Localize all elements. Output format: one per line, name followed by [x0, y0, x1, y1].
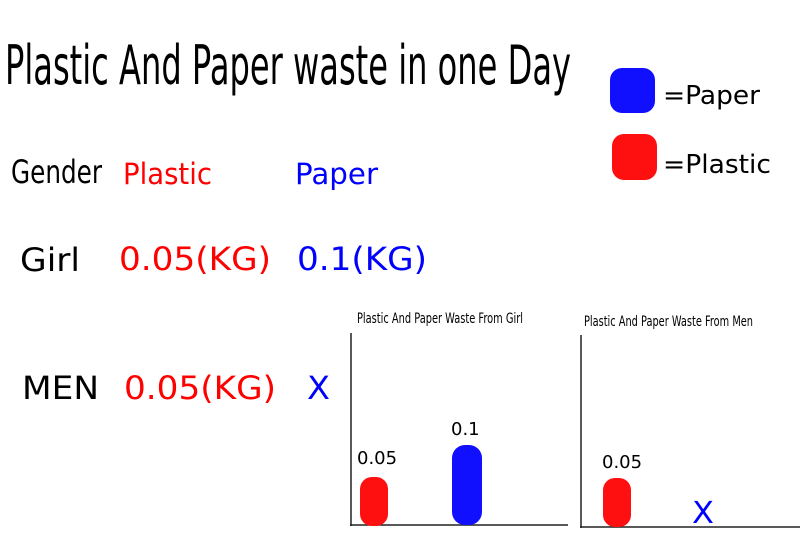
chart title: girl: Plastic And Paper Waste From Girl: [357, 311, 523, 327]
header: plastic: Plastic: [123, 157, 212, 191]
row: girl: Girl: [20, 241, 80, 279]
row: men: MEN: [22, 369, 99, 407]
bar: girl plastic: [360, 477, 388, 526]
data table: 0.05(KG): [124, 369, 276, 407]
chart: girl: [350, 311, 568, 526]
chart: girl: 0.05: [357, 448, 397, 469]
data table: X: [307, 369, 330, 407]
header: paper: Paper: [295, 157, 378, 191]
legend: paper swatch: [610, 68, 655, 113]
bar: girl paper: [452, 445, 482, 525]
legend: [610, 68, 771, 180]
header: gender: Gender: [11, 153, 103, 191]
data table: 0.1(KG): [297, 240, 427, 278]
chart: girl: 0.1: [451, 419, 480, 440]
chart: men: [580, 314, 800, 531]
legend: paper label: =Paper: [663, 81, 760, 111]
legend: plastic swatch: [612, 134, 657, 180]
legend: plastic label: =Plastic: [663, 150, 771, 180]
bar: men plastic: [603, 478, 631, 527]
data table: 0.05(KG): [119, 240, 271, 278]
men paper: none: X: [692, 496, 714, 531]
chart: men: 0.05: [602, 452, 642, 473]
data table: [11, 153, 427, 407]
